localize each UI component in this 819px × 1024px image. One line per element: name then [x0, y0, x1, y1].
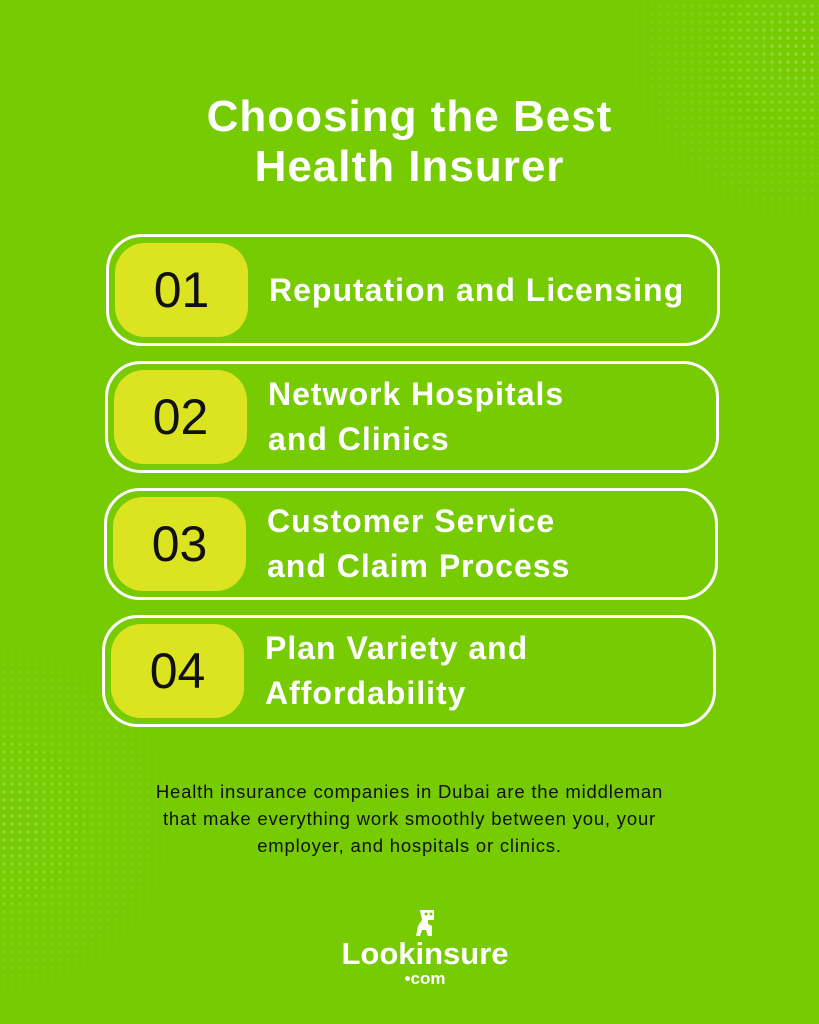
- logo: [341, 910, 509, 988]
- badge 03: 03: [152, 516, 207, 572]
- label 02: and Clinics: [268, 421, 450, 457]
- card 04: [102, 615, 716, 727]
- card 02: [105, 361, 719, 473]
- badge 04: 04: [150, 643, 205, 699]
- label 04: Plan Variety and: [265, 630, 528, 666]
- label 02: Network Hospitals: [268, 376, 564, 412]
- logo: •com: [405, 969, 445, 988]
- title: Choosing the Best: [207, 92, 612, 141]
- label 04: Affordability: [265, 675, 466, 711]
- badge 04: [111, 624, 244, 718]
- badge 02: [114, 370, 247, 464]
- badge 01: [115, 243, 248, 337]
- badge 02: 02: [153, 389, 208, 445]
- body text: employer, and hospitals or clinics.: [257, 835, 562, 856]
- label 03: Customer Service: [267, 503, 555, 539]
- card 01: [106, 234, 720, 346]
- badge 03: [113, 497, 246, 591]
- label 01: Reputation and Licensing: [269, 272, 684, 308]
- icon: dino: [416, 910, 434, 936]
- body text: that make everything work smoothly between you, your: [163, 808, 656, 829]
- label 02: [268, 376, 564, 457]
- label 04: [265, 630, 528, 711]
- title: Health Insurer: [255, 142, 564, 191]
- label 03: [267, 503, 570, 584]
- body text: [156, 781, 663, 856]
- logo: Lookinsure: [341, 936, 509, 971]
- title: [207, 92, 612, 191]
- body text: Health insurance companies in Dubai are the middleman: [156, 781, 663, 802]
- card 03: [104, 488, 718, 600]
- badge 01: 01: [154, 262, 209, 318]
- label 03: and Claim Process: [267, 548, 570, 584]
